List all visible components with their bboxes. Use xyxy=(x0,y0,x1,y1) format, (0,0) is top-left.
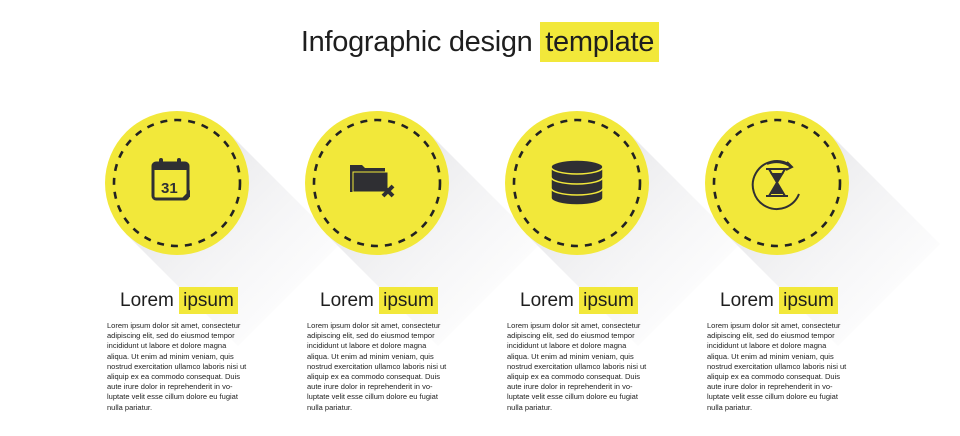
text 1: Lorem ipsum dolor sit amet, consectetur xyxy=(107,321,240,330)
text 2: luptate velit esse cillum dolore eu fugiat xyxy=(307,392,438,401)
text 3: nostrud exercitation ullamco laboris nisi ut xyxy=(507,362,646,371)
text 4: nulla pariatur. xyxy=(707,403,752,412)
text 4: nostrud exercitation ullamco laboris nisi ut xyxy=(707,362,846,371)
text 4: aute irure dolor in reprehenderit in vo- xyxy=(707,382,832,391)
icon: database xyxy=(551,160,603,205)
text 2: adipiscing elit, sed do eiusmod tempor xyxy=(307,331,435,340)
text 2: nulla pariatur. xyxy=(307,403,352,412)
circle 2 xyxy=(305,111,540,346)
text 2: aliquip ex ea commodo consequat. Duis xyxy=(307,372,440,381)
text 4: aliqua. Ut enim ad minim veniam, quis xyxy=(707,352,834,361)
circle 4 xyxy=(705,111,940,346)
text 3: Lorem ipsum dolor sit amet, consectetur xyxy=(507,321,640,330)
text 1: luptate velit esse cillum dolore eu fugiat xyxy=(107,392,238,401)
text 4: adipiscing elit, sed do eiusmod tempor xyxy=(707,331,835,340)
text 1: incididunt ut labore et dolore magna xyxy=(107,341,226,350)
text 4: aliquip ex ea commodo consequat. Duis xyxy=(707,372,840,381)
heading 1: Lorem ipsum xyxy=(120,290,234,311)
text 1: nostrud exercitation ullamco laboris nisi ut xyxy=(107,362,246,371)
text 1: aliquip ex ea commodo consequat. Duis xyxy=(107,372,240,381)
text 2: nostrud exercitation ullamco laboris nisi ut xyxy=(307,362,446,371)
heading 4: Lorem ipsum xyxy=(720,290,834,311)
text 4 xyxy=(707,321,846,412)
heading 2: Lorem ipsum xyxy=(320,290,434,311)
text 2 xyxy=(307,321,446,412)
text 1: nulla pariatur. xyxy=(107,403,152,412)
text 1 xyxy=(107,321,246,412)
circle 1 xyxy=(105,111,340,346)
title: Infographic design template xyxy=(301,26,654,58)
text 4: incididunt ut labore et dolore magna xyxy=(707,341,826,350)
icon: folder with x xyxy=(350,165,393,196)
icon: calendar: 31 xyxy=(161,180,178,197)
text 2: aute irure dolor in reprehenderit in vo- xyxy=(307,382,432,391)
text 3: aliqua. Ut enim ad minim veniam, quis xyxy=(507,352,634,361)
text 3: incididunt ut labore et dolore magna xyxy=(507,341,626,350)
text 2: incididunt ut labore et dolore magna xyxy=(307,341,426,350)
text 1: aliqua. Ut enim ad minim veniam, quis xyxy=(107,352,234,361)
text 2: aliqua. Ut enim ad minim veniam, quis xyxy=(307,352,434,361)
text 4: Lorem ipsum dolor sit amet, consectetur xyxy=(707,321,840,330)
text 3: adipiscing elit, sed do eiusmod tempor xyxy=(507,331,635,340)
text 3: aliquip ex ea commodo consequat. Duis xyxy=(507,372,640,381)
text 3: luptate velit esse cillum dolore eu fugiat xyxy=(507,392,638,401)
text 3: nulla pariatur. xyxy=(507,403,552,412)
circle 3 xyxy=(505,111,740,346)
text 2: Lorem ipsum dolor sit amet, consectetur xyxy=(307,321,440,330)
heading 3: Lorem ipsum xyxy=(520,290,634,311)
icon: calendar xyxy=(153,158,190,199)
text 1: aute irure dolor in reprehenderit in vo- xyxy=(107,382,232,391)
icon: hourglass rotate xyxy=(753,161,799,209)
text 3: aute irure dolor in reprehenderit in vo- xyxy=(507,382,632,391)
text 3 xyxy=(507,321,646,412)
text 1: adipiscing elit, sed do eiusmod tempor xyxy=(107,331,235,340)
text 4: luptate velit esse cillum dolore eu fugiat xyxy=(707,392,838,401)
